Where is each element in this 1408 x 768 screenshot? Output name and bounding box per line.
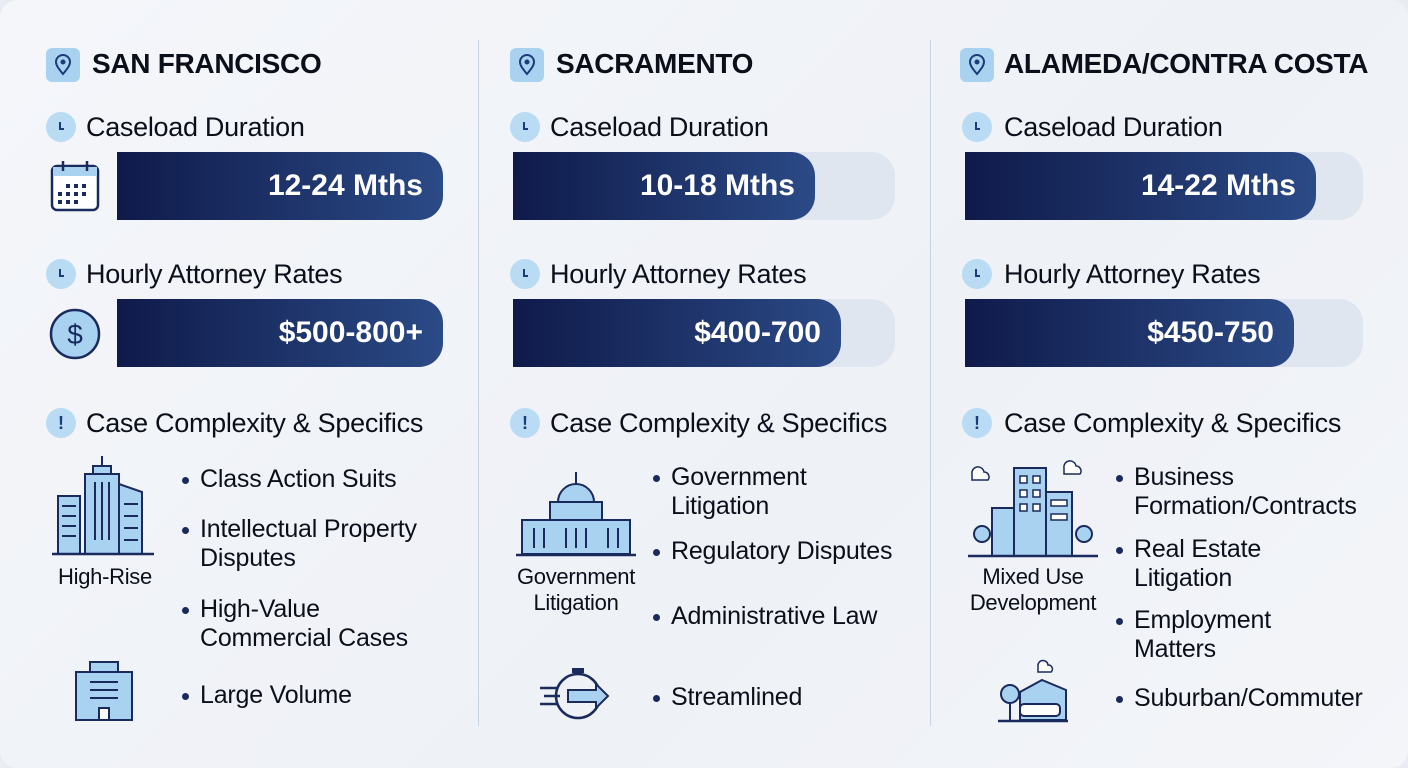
icon: capitol: [516, 472, 636, 615]
bar: 10-18 Mths: [513, 152, 895, 220]
bullets: High-Value: [200, 595, 320, 623]
bullets: Litigation: [1134, 564, 1232, 592]
icon: dollar: $: [67, 319, 83, 350]
bar: 14-22 Mths: [965, 152, 1363, 220]
icon: calendar: [50, 161, 100, 212]
heading: complexity: Case Complexity & Specifics: [86, 408, 423, 438]
bullets: Business: [1134, 463, 1234, 491]
icon: dollar: [50, 308, 100, 360]
bullets: Government: [671, 463, 807, 491]
bullets: Matters: [1134, 635, 1216, 663]
heading: complexity: !: [58, 413, 64, 433]
heading: caseload: Caseload Duration: [86, 112, 305, 142]
bullets: Formation/Contracts: [1134, 492, 1357, 520]
icon: mixed use: Development: [970, 590, 1096, 615]
bullets: Class Action Suits: [200, 465, 396, 493]
bar: $500-800+: $500-800+: [279, 316, 423, 349]
heading: complexity: Case Complexity & Specifics: [550, 408, 887, 438]
heading: rates: Hourly Attorney Rates: [1004, 259, 1260, 289]
panel: Sacramento: [510, 48, 895, 720]
icon: capitol: Litigation: [533, 590, 619, 615]
icon: office building: [75, 661, 133, 721]
bullets: Real Estate: [1134, 535, 1261, 563]
bullets: Streamlined: [671, 683, 802, 711]
icon: mixed use: Mixed Use: [982, 564, 1084, 589]
bar: 10-18 Mths: 10-18 Mths: [640, 169, 795, 202]
bullets: [653, 463, 892, 711]
icon: capitol: Government: [517, 564, 635, 589]
bar: $500-800+: [117, 299, 443, 367]
bullets: Regulatory Disputes: [671, 537, 892, 565]
title: Alameda: ALAMEDA/CONTRA COSTA: [1004, 48, 1368, 79]
bullets: Suburban/Commuter: [1134, 684, 1363, 712]
icon: high-rise: High-Rise: [58, 564, 152, 589]
bullets: Large Volume: [200, 681, 352, 709]
bar: $450-750: [965, 299, 1363, 367]
bar: 14-22 Mths: 14-22 Mths: [1141, 169, 1296, 202]
bar: $450-750: $450-750: [1147, 316, 1274, 349]
icon: suburban car: [998, 660, 1068, 722]
bar: 12-24 Mths: 12-24 Mths: [268, 169, 423, 202]
bullets: Employment: [1134, 606, 1271, 634]
bullets: [182, 465, 417, 709]
bar: $400-700: [513, 299, 895, 367]
bullets: Commercial Cases: [200, 624, 408, 652]
bullets: Intellectual Property: [200, 515, 417, 543]
bullets: Litigation: [671, 492, 769, 520]
heading: complexity: Case Complexity & Specifics: [1004, 408, 1341, 438]
bullets: [1116, 463, 1363, 712]
title: San Francisco: SAN FRANCISCO: [92, 48, 321, 79]
bar: $400-700: $400-700: [694, 316, 821, 349]
panel: Alameda/Contra Costa: [960, 48, 1368, 722]
bar: 12-24 Mths: [117, 152, 443, 220]
heading: rates: Hourly Attorney Rates: [86, 259, 342, 289]
icon: mixed use: [968, 460, 1098, 615]
title: Sacramento: SACRAMENTO: [556, 48, 753, 79]
heading: complexity: !: [974, 413, 980, 433]
heading: complexity: !: [522, 413, 528, 433]
bullets: Administrative Law: [671, 602, 877, 630]
heading: rates: Hourly Attorney Rates: [550, 259, 806, 289]
heading: caseload: Caseload Duration: [550, 112, 769, 142]
heading: caseload: Caseload Duration: [1004, 112, 1223, 142]
icon: high-rise: [52, 456, 154, 589]
icon: stopwatch arrow: [540, 668, 610, 720]
panel: San Francisco: [46, 48, 443, 721]
bullets: Disputes: [200, 544, 296, 572]
